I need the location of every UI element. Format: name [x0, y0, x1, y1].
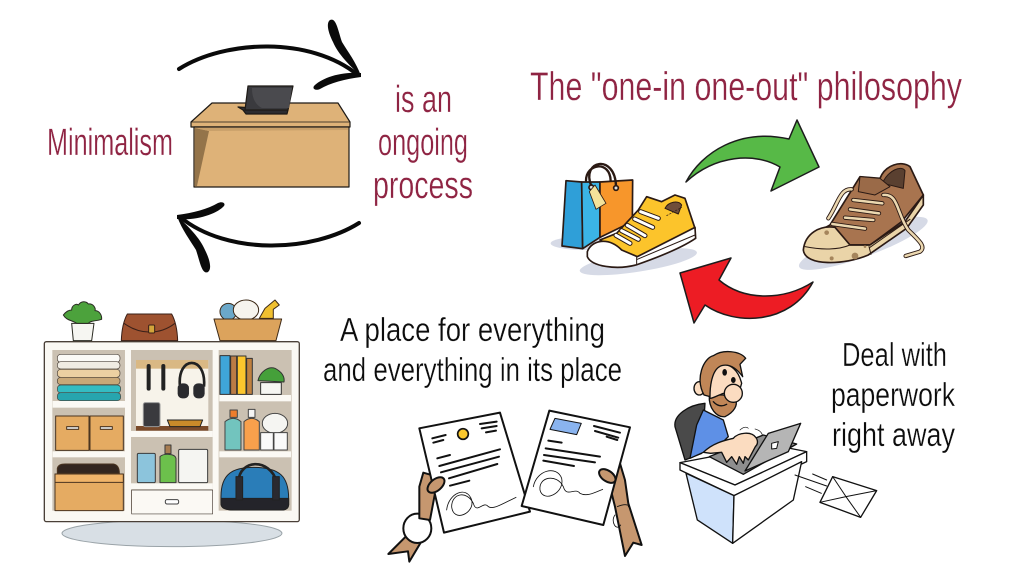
icon: towels: [57, 354, 121, 401]
panel: one-in one-out philosophy: [530, 65, 962, 323]
icon: laptop and typing hands: [703, 423, 801, 474]
icon: desk with laptop: [191, 86, 350, 187]
text: is an ongoing process: is an: [395, 79, 452, 121]
icon: shopping bag and new yellow shoe: [551, 164, 698, 281]
icon: left thumb: [425, 474, 447, 496]
icon: right document: [522, 411, 630, 525]
icon: head: [694, 352, 746, 417]
icon: brown bag: [121, 314, 178, 341]
heading: A place for everything and everything in its place: and everything in its place: [323, 351, 622, 388]
icon: blue duffel bag: [221, 464, 289, 510]
icon: desk: [680, 445, 807, 543]
text: is an ongoing process: ongoing: [378, 122, 468, 164]
heading: Deal with paperwork right away: Deal with: [842, 336, 947, 373]
text: Minimalism: Minimalism: [47, 122, 173, 164]
icon: bottles and rolls, centre: [137, 445, 208, 483]
heading: Deal with paperwork right away: right away: [832, 416, 955, 453]
text: is an ongoing process: process: [373, 165, 473, 207]
panel: minimalism ongoing process: [47, 20, 473, 272]
arrow: red: [680, 258, 813, 323]
icon: chair: [675, 403, 705, 460]
icon: envelope: [795, 474, 877, 517]
icon: left document: [419, 413, 530, 533]
icon: bottles and rolls, right: [225, 409, 288, 450]
icon: right thumb: [597, 466, 618, 486]
icon: hands holding signed documents: [388, 411, 642, 562]
icon: plant on shelf top: [63, 302, 102, 341]
icon: shirt: [690, 410, 728, 458]
arrow: top clockwise: [179, 20, 361, 90]
icon: man typing on laptop: [690, 352, 801, 474]
icon: shelf unit: [44, 342, 299, 522]
heading: Deal with paperwork right away: paperwork: [831, 376, 955, 413]
icon: right hand: [610, 463, 642, 556]
icon: rug: [62, 520, 282, 547]
heading: A place for everything and everything in its place: [323, 311, 622, 388]
heading: A place for everything and everything in its place: A place for everything: [340, 311, 605, 348]
icon: left hand: [388, 473, 443, 562]
arrow: bottom clockwise: [177, 202, 359, 272]
icon: worn brown shoe: [795, 164, 932, 279]
text: is an ongoing process: [373, 79, 473, 207]
icon: books and plant, right: [220, 356, 284, 394]
icon: pegboard with headphones and keys: [136, 360, 208, 431]
icon: desk and envelope: [675, 403, 877, 543]
arrow: green: [686, 120, 819, 191]
heading: Deal with paperwork right away: [831, 336, 955, 453]
panel: organised storage shelf: [44, 300, 299, 547]
icon: cardboard boxes: [55, 416, 123, 511]
icon: basket: [214, 300, 282, 341]
